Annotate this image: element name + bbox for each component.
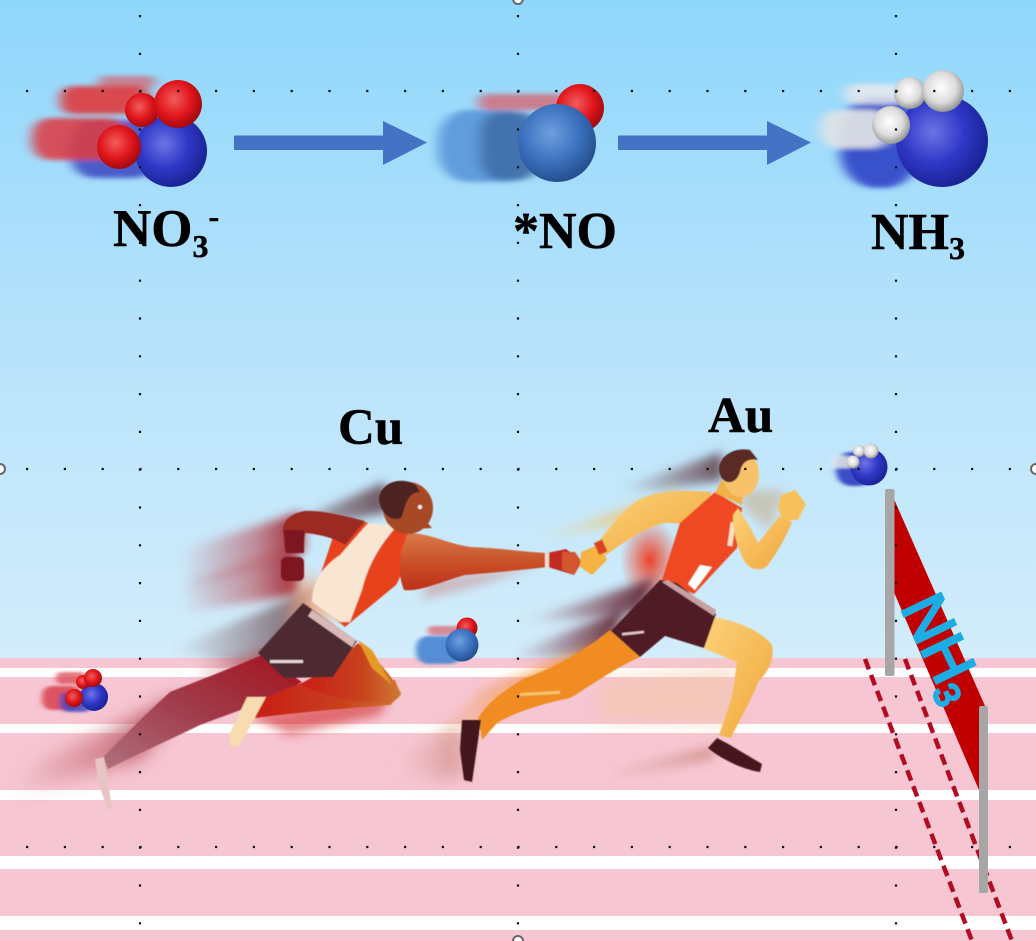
runner: Cu (10, 481, 582, 810)
label: *NO: *NO (513, 203, 617, 260)
Cu back shoe (95, 757, 112, 810)
banner text NH3: 3 (924, 677, 970, 713)
Au torso (662, 492, 742, 594)
right pole (979, 706, 988, 893)
Cu front lower leg (255, 680, 401, 718)
banner flag (890, 490, 985, 790)
molecule: *NO large (438, 84, 604, 182)
Cu motion trails (10, 482, 540, 795)
Cu head (383, 482, 433, 534)
runner: Au (400, 449, 806, 782)
Au motion trails (400, 452, 785, 778)
label: NO3-: NO (113, 200, 192, 258)
Au back arm (596, 491, 712, 555)
Cu front thigh (300, 643, 401, 703)
label: NH3: 3 (949, 230, 965, 266)
molecule: NO3- on track (42, 669, 108, 712)
label: Cu: Cu (338, 400, 403, 456)
Cu torso (312, 522, 413, 627)
label: Au: Au (708, 388, 773, 444)
Au head (723, 451, 759, 497)
left pole (885, 489, 894, 676)
Au front leg (703, 617, 773, 738)
Cu back leg (103, 655, 302, 769)
label: NH3: NH (871, 204, 949, 261)
molecule: *NO on track (416, 618, 478, 664)
Au back shoe (460, 720, 481, 782)
sky background (0, 0, 1036, 660)
molecule: NH3 at finish (832, 444, 888, 486)
arrow 2 (618, 121, 811, 165)
Au front shoe (708, 738, 762, 772)
Au shorts (611, 580, 716, 657)
Cu front shoe (229, 697, 266, 747)
Cu neck (385, 505, 432, 530)
arrow 1 (234, 121, 427, 165)
label: NO3-: 3 (192, 228, 208, 264)
Au neck (715, 480, 745, 505)
Au front arm (733, 508, 792, 569)
finish banner (885, 489, 997, 893)
molecule: NH3 large (820, 70, 988, 188)
Cu shorts (258, 603, 357, 678)
molecule: NO3- large (32, 76, 207, 187)
Au back leg (478, 630, 640, 740)
running track (0, 658, 1036, 941)
Cu back arm (283, 511, 365, 552)
label: NO3-: - (208, 198, 219, 234)
finish lane dashed lines (865, 659, 1012, 941)
banner text NH3: NH (887, 583, 988, 694)
Cu front arm (400, 533, 548, 590)
